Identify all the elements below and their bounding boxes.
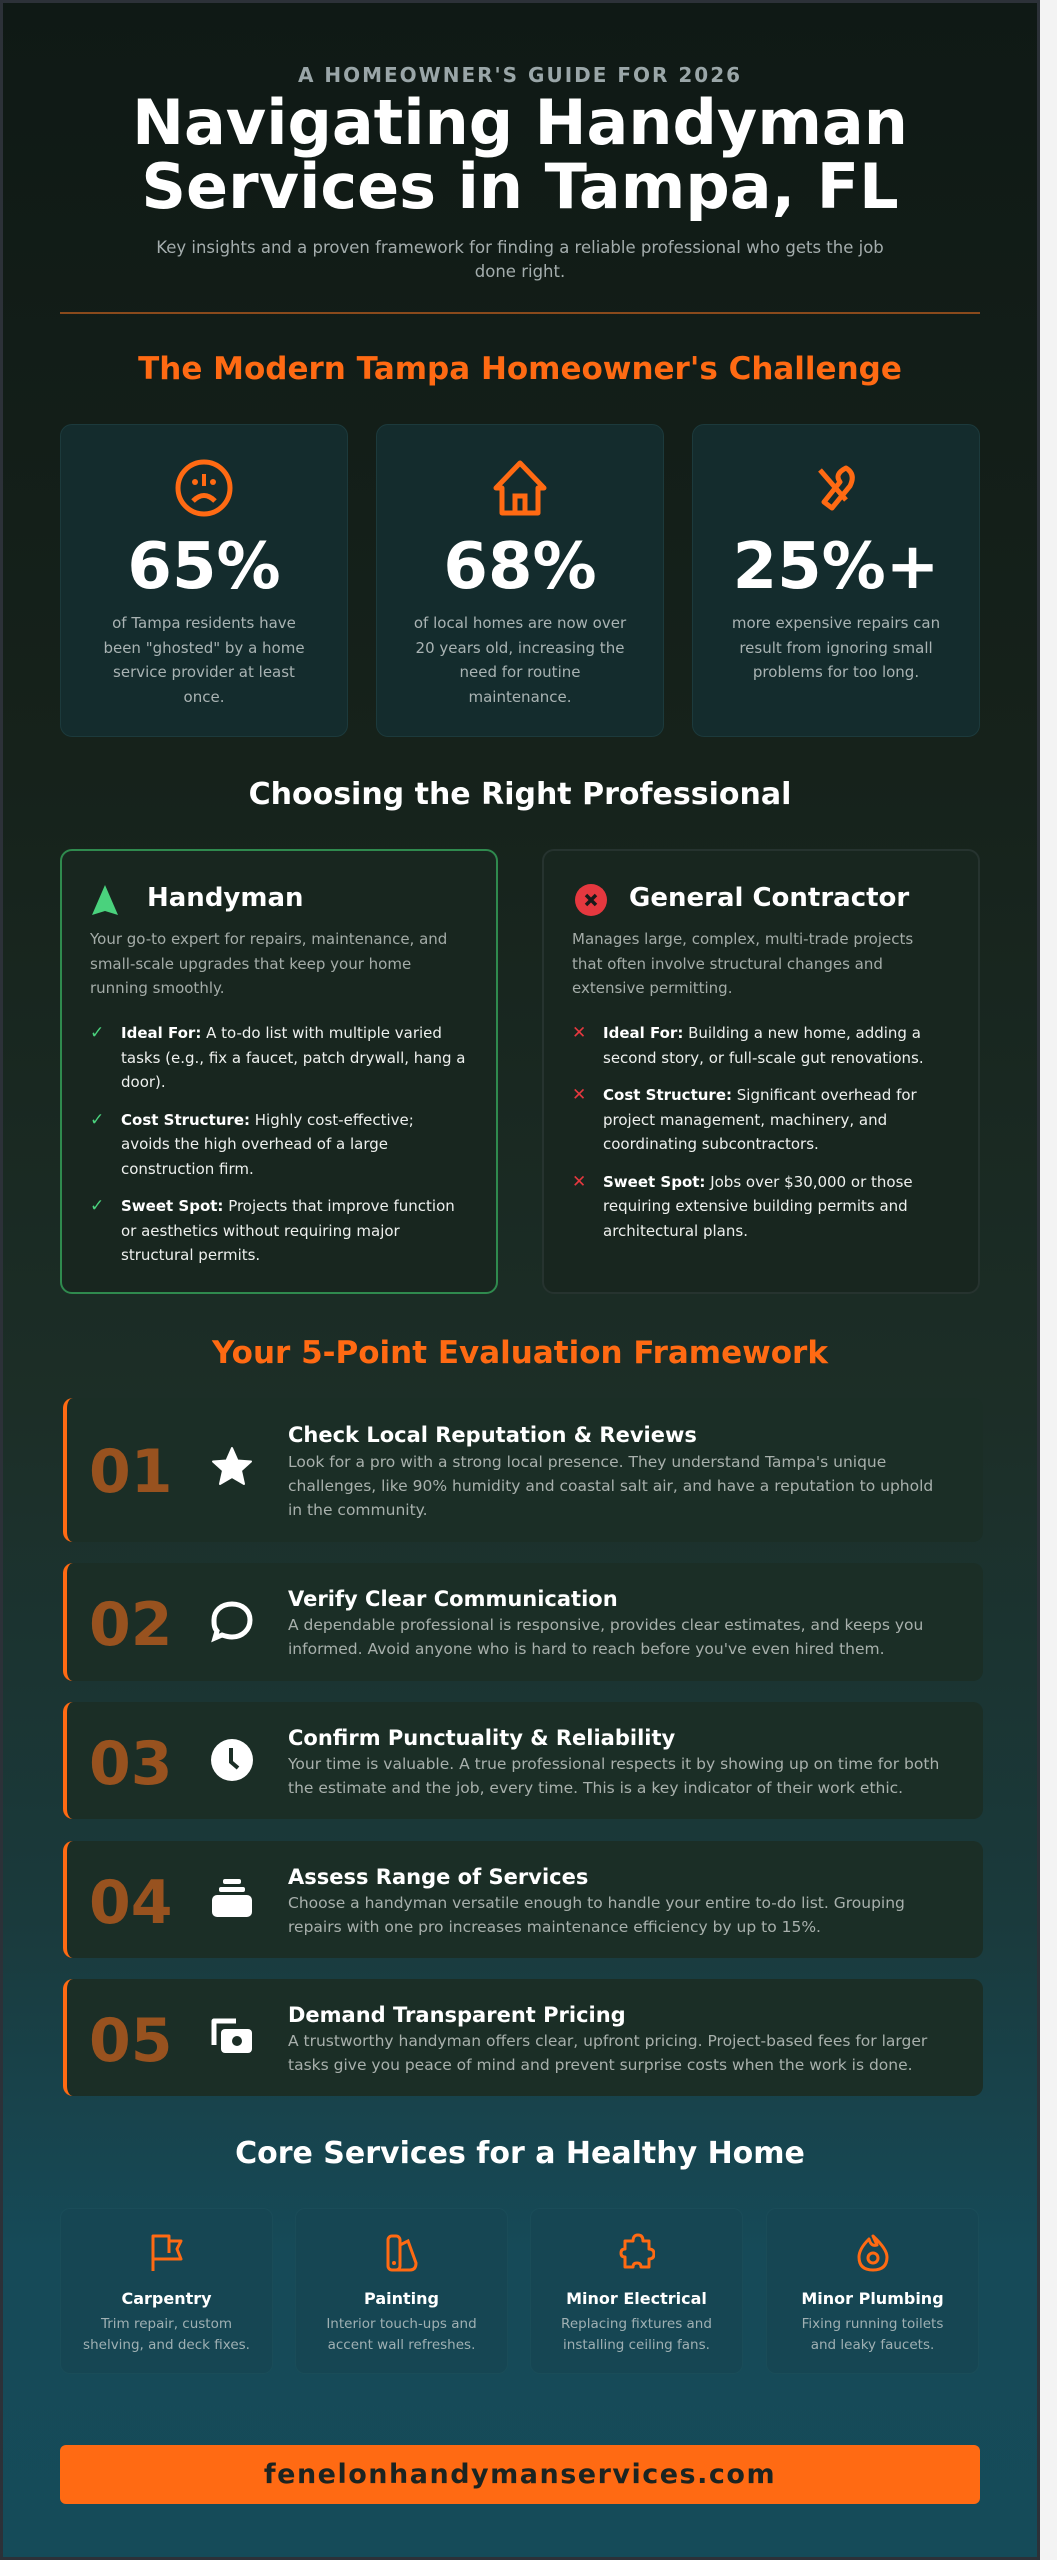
icon: drop <box>858 2234 888 2272</box>
icon: money <box>212 2018 252 2053</box>
list: contractor: ✕ <box>572 1172 586 1192</box>
service: electrical <box>530 2208 743 2374</box>
icon: swatch <box>386 2234 418 2272</box>
step 01: Look for a pro with a strong local presence. They understand Tampa's unique challenges, like 90% humidity and coastal salt air, and have a reputation to uphold in the community. <box>288 1453 933 1519</box>
list: handyman pros: ✓ <box>90 1196 104 1216</box>
icon: sad face <box>176 460 232 516</box>
step 01: 01 <box>89 1437 172 1507</box>
stat: 65%: 65% <box>127 530 281 604</box>
panel: handyman: Your go-to expert for repairs, maintenance, and small-scale upgrades that keep your home running smoothly. <box>90 930 447 997</box>
step 04: 04 <box>89 1868 172 1938</box>
step 02: 02 <box>89 1590 172 1660</box>
heading: framework: Your 5-Point Evaluation Framework <box>212 1335 828 1371</box>
panel: general contractor: General Contractor <box>629 883 909 913</box>
stat: 65% <box>60 424 348 737</box>
icon: puzzle <box>620 2234 655 2268</box>
list: handyman pros: ✓ <box>90 1023 104 1043</box>
service: plumbing: Minor Plumbing <box>801 2289 944 2308</box>
icon: green arrow <box>92 885 118 915</box>
heading: core services: Core Services for a Healthy Home <box>235 2136 805 2171</box>
icon: flag <box>152 2234 182 2271</box>
step 04: Choose a handyman versatile enough to handle your entire to-do list. Grouping repairs with one pro increases maintenance efficiency by up to 15%. <box>288 1894 905 1936</box>
step 04 <box>63 1841 983 1958</box>
step 03: Your time is valuable. A true professional respects it by showing up on time for both the estimate and the job, every time. This is a key indicator of their work ethic. <box>288 1755 939 1797</box>
step 03 <box>63 1702 983 1819</box>
service: plumbing: Fixing running toilets and leaky faucets. <box>802 2316 943 2353</box>
icon: star <box>212 1447 252 1485</box>
CTA bar: fenelonhandymanservices.com <box>264 2459 776 2490</box>
icon: stack <box>212 1879 252 1917</box>
list: handyman pros: ✓ <box>90 1110 104 1130</box>
list: handyman pros: Cost Structure: Highly cost-effective; avoids the high overhead of a large construction firm. <box>121 1110 414 1178</box>
icon: broken tool <box>818 466 855 510</box>
icon: clock <box>211 1739 253 1781</box>
icon: red x <box>575 884 607 916</box>
step 03: Confirm Punctuality & Reliability <box>288 1726 675 1750</box>
service: electrical: Replacing fixtures and installing ceiling fans. <box>561 2316 712 2353</box>
step 05 <box>63 1979 983 2096</box>
panel: general contractor <box>542 849 980 1294</box>
list: contractor: Cost Structure: Significant overhead for project management, machinery, and coordinating subcontractors. <box>603 1086 917 1153</box>
service: electrical: Minor Electrical <box>566 2289 707 2308</box>
step 04: Assess Range of Services <box>288 1865 588 1889</box>
step 05: A trustworthy handyman offers clear, upfront pricing. Project-based fees for larger tasks give you peace of mind and prevent surprise costs when the work is done. <box>288 2032 927 2074</box>
step 02: Verify Clear Communication <box>288 1587 618 1611</box>
subtitle: Key insights and a proven framework for finding a reliable professional who gets the job done right. <box>156 238 884 281</box>
stat cards <box>60 424 980 737</box>
panel: handyman: Handyman <box>147 883 304 913</box>
list: handyman pros <box>90 1023 465 1264</box>
title: Navigating Handyman <box>132 86 908 159</box>
service: carpentry <box>60 2208 273 2374</box>
step 05: 05 <box>89 2006 172 2076</box>
list: contractor: ✕ <box>572 1085 586 1105</box>
step 02 <box>63 1563 983 1681</box>
list: contractor: Ideal For: Building a new home, adding a second story, or full-scale gut renovations. <box>603 1024 924 1066</box>
list: handyman pros: Sweet Spot: Projects that improve function or aesthetics without requiring major structural permits. <box>121 1197 455 1264</box>
stat: 25%+: 25%+ <box>733 530 939 604</box>
service: painting: Interior touch-ups and accent wall refreshes. <box>326 2316 477 2353</box>
stat: 68%: 68% <box>443 530 597 604</box>
list: handyman pros: Ideal For: A to-do list with multiple varied tasks (e.g., fix a faucet, patch drywall, hang a door). <box>121 1024 465 1091</box>
stat: 25%+: more expensive repairs can result from ignoring small problems for too long. <box>732 614 940 681</box>
stat: 25%+ <box>692 424 980 737</box>
service: carpentry: Carpentry <box>121 2289 212 2308</box>
icon: chat <box>211 1602 252 1642</box>
title <box>132 86 908 223</box>
panel: general contractor: Manages large, complex, multi-trade projects that often involve structural changes and extensive permitting. <box>572 930 913 997</box>
panel: handyman <box>60 849 498 1294</box>
step 02: A dependable professional is responsive, provides clear estimates, and keeps you informed. Avoid anyone who is hard to reach before you've even hired them. <box>288 1616 923 1658</box>
step 01 <box>63 1398 983 1542</box>
list: contractor <box>572 1023 924 1240</box>
step 01: Check Local Reputation & Reviews <box>288 1423 697 1447</box>
heading: choosing: Choosing the Right Professional <box>249 777 791 812</box>
icon: house <box>494 460 546 516</box>
service: painting: Painting <box>364 2289 439 2308</box>
title: Services in Tampa, FL <box>141 150 899 223</box>
list: contractor: ✕ <box>572 1023 586 1043</box>
stat: 68% <box>376 424 664 737</box>
list: contractor: Sweet Spot: Jobs over $30,000 or those requiring extensive building permits and architectural plans. <box>603 1172 913 1240</box>
step 03: 03 <box>89 1729 172 1799</box>
heading: challenge: The Modern Tampa Homeowner's Challenge <box>138 351 902 387</box>
stat: 65%: of Tampa residents have been "ghosted" by a home service provider at least once. <box>103 614 305 706</box>
step 05: Demand Transparent Pricing <box>288 2003 626 2027</box>
stat: 68%: of local homes are now over 20 years old, increasing the need for routine maintenance. <box>414 614 626 706</box>
eyebrow: A HOMEOWNER'S GUIDE FOR 2026 <box>298 63 742 87</box>
service: plumbing <box>766 2208 979 2374</box>
service: painting <box>295 2208 508 2374</box>
CTA bar <box>60 2445 980 2504</box>
service: carpentry: Trim repair, custom shelving, and deck fixes. <box>83 2316 250 2353</box>
